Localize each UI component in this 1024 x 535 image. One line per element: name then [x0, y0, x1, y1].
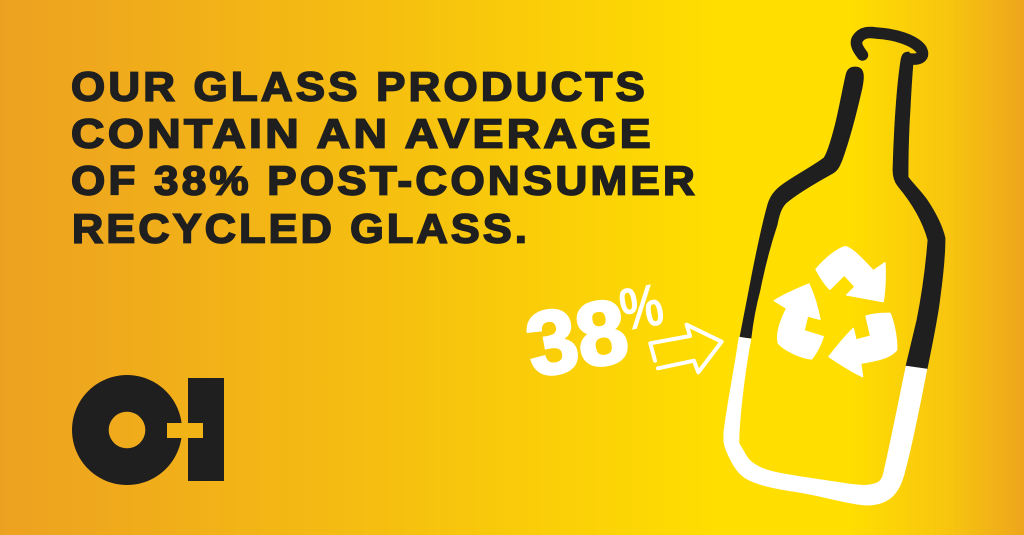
callout: 38% label: 38 [519, 281, 635, 397]
heading: OUR GLASS PRODUCTS [71, 64, 648, 110]
arrow pointing to bottle [650, 325, 722, 372]
heading: OF 38% POST-CONSUMER [71, 158, 698, 204]
heading [71, 64, 698, 252]
bottle: black right wall [893, 52, 945, 369]
bottle: black upper left wall [740, 67, 863, 338]
bottle: lip [856, 32, 923, 59]
heading: CONTAIN AN AVERAGE [71, 110, 654, 156]
heading: RECYCLED GLASS. [72, 206, 530, 252]
logo: O-I [72, 375, 224, 485]
bottle [724, 32, 945, 505]
callout: 38% label: % [615, 270, 668, 344]
icon: recycling arrows [774, 247, 897, 377]
bottle: white recycled portion [724, 337, 927, 505]
